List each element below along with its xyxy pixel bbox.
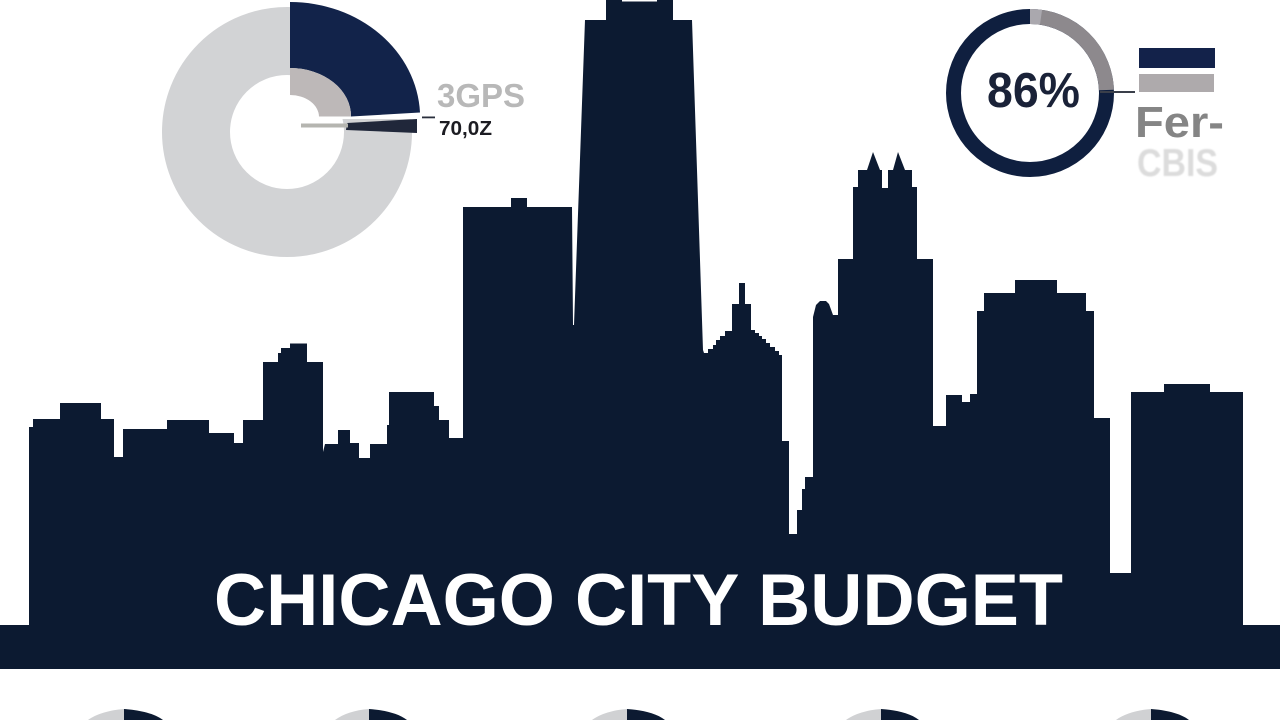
title: CHICAGO CITY BUDGET — [214, 560, 1063, 641]
bottom pie 4 — [846, 709, 919, 720]
dark strip — [346, 119, 417, 133]
donut label: dark value: 70,0Z — [439, 118, 492, 140]
bottom pie 5 — [1116, 709, 1189, 720]
donut chart: budget share — [196, 0, 525, 223]
ring track — [954, 16, 1106, 170]
bottom pie 3 — [592, 709, 665, 720]
connector line — [1100, 91, 1135, 93]
label tick — [422, 116, 435, 118]
lighter start of grey arc — [1030, 9, 1041, 25]
white gap — [291, 0, 426, 119]
ring value: 86% — [987, 64, 1080, 118]
donut ring — [196, 41, 378, 223]
progress ring: 86% — [954, 16, 1135, 170]
donut label: grey value: 3GPS — [437, 77, 525, 114]
grey pointer line — [301, 124, 348, 128]
legend label: dark: Fer- — [1135, 98, 1224, 147]
legend — [1135, 48, 1224, 185]
taupe inner sector — [290, 68, 351, 116]
grey ring arc — [1030, 16, 1106, 90]
legend label: light: CBIS — [1137, 142, 1218, 185]
bottom pie 2 — [335, 709, 407, 720]
navy sector — [290, 2, 420, 117]
legend navy bar — [1139, 48, 1215, 68]
bottom pie 1 — [88, 709, 163, 720]
legend grey bar — [1139, 74, 1214, 92]
